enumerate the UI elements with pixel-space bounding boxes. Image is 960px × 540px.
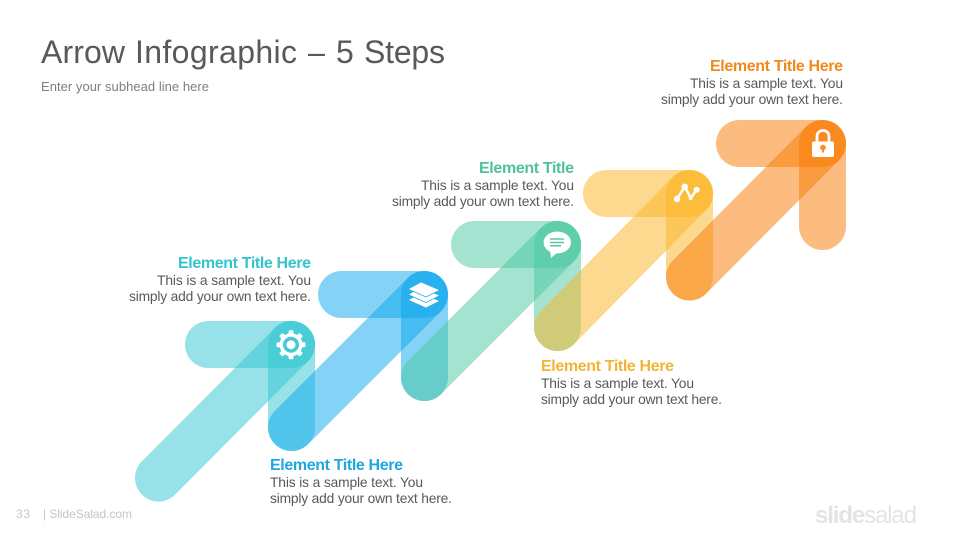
title: 5: [336, 34, 354, 70]
text block: step 3: [392, 160, 574, 209]
text block: step 5: [661, 58, 843, 107]
text block: step 5: This is a sample text. You: [690, 76, 843, 91]
subhead: Enter your subhead line here: [41, 79, 209, 94]
text block: step 4: This is a sample text. You: [541, 376, 694, 391]
arrow 3: green: [424, 244, 558, 378]
text block: step 1: This is a sample text. You: [157, 273, 311, 288]
arrow 1: teal: [158, 344, 292, 478]
text block: step 3: This is a sample text. You: [421, 178, 574, 193]
icon: speech bubble: [544, 232, 571, 258]
text block: step 4: Element Title Here: [541, 358, 674, 375]
footer: site name: | SlideSalad.com: [43, 507, 132, 521]
title: –: [308, 34, 325, 70]
text block: step 1: [129, 255, 311, 304]
text block: step 4: [541, 358, 722, 407]
arrow 5: orange: [690, 144, 822, 277]
text block: step 4: simply add your own text here.: [541, 392, 722, 407]
text block: step 1: Element Title Here: [178, 255, 311, 272]
icon: line graph nodes: [674, 184, 700, 202]
arrow 4: yellow: [558, 194, 690, 328]
text block: step 5: simply add your own text here.: [661, 92, 843, 107]
text block: step 1: simply add your own text here.: [129, 289, 311, 304]
logo: slidesalad wordmark: slidesalad: [815, 502, 917, 529]
title: Arrow: [41, 34, 126, 70]
title: [41, 34, 445, 70]
text block: step 2: Element Title Here: [270, 457, 403, 474]
text block: step 5: Element Title Here: [710, 58, 843, 75]
footer: page number: 33: [16, 507, 30, 521]
icon: padlock: [812, 130, 834, 157]
title: Infographic: [135, 34, 297, 70]
title: Steps: [364, 34, 445, 70]
text block: step 2: This is a sample text. You: [270, 475, 423, 490]
icon: gear: [276, 330, 306, 359]
arrow 2: blue: [292, 294, 424, 428]
text block: step 2: [270, 457, 452, 506]
icon: layers: [408, 282, 440, 308]
text block: step 2: simply add your own text here.: [270, 491, 452, 506]
text block: step 3: simply add your own text here.: [392, 194, 574, 209]
text block: step 3: Element Title: [479, 160, 574, 177]
